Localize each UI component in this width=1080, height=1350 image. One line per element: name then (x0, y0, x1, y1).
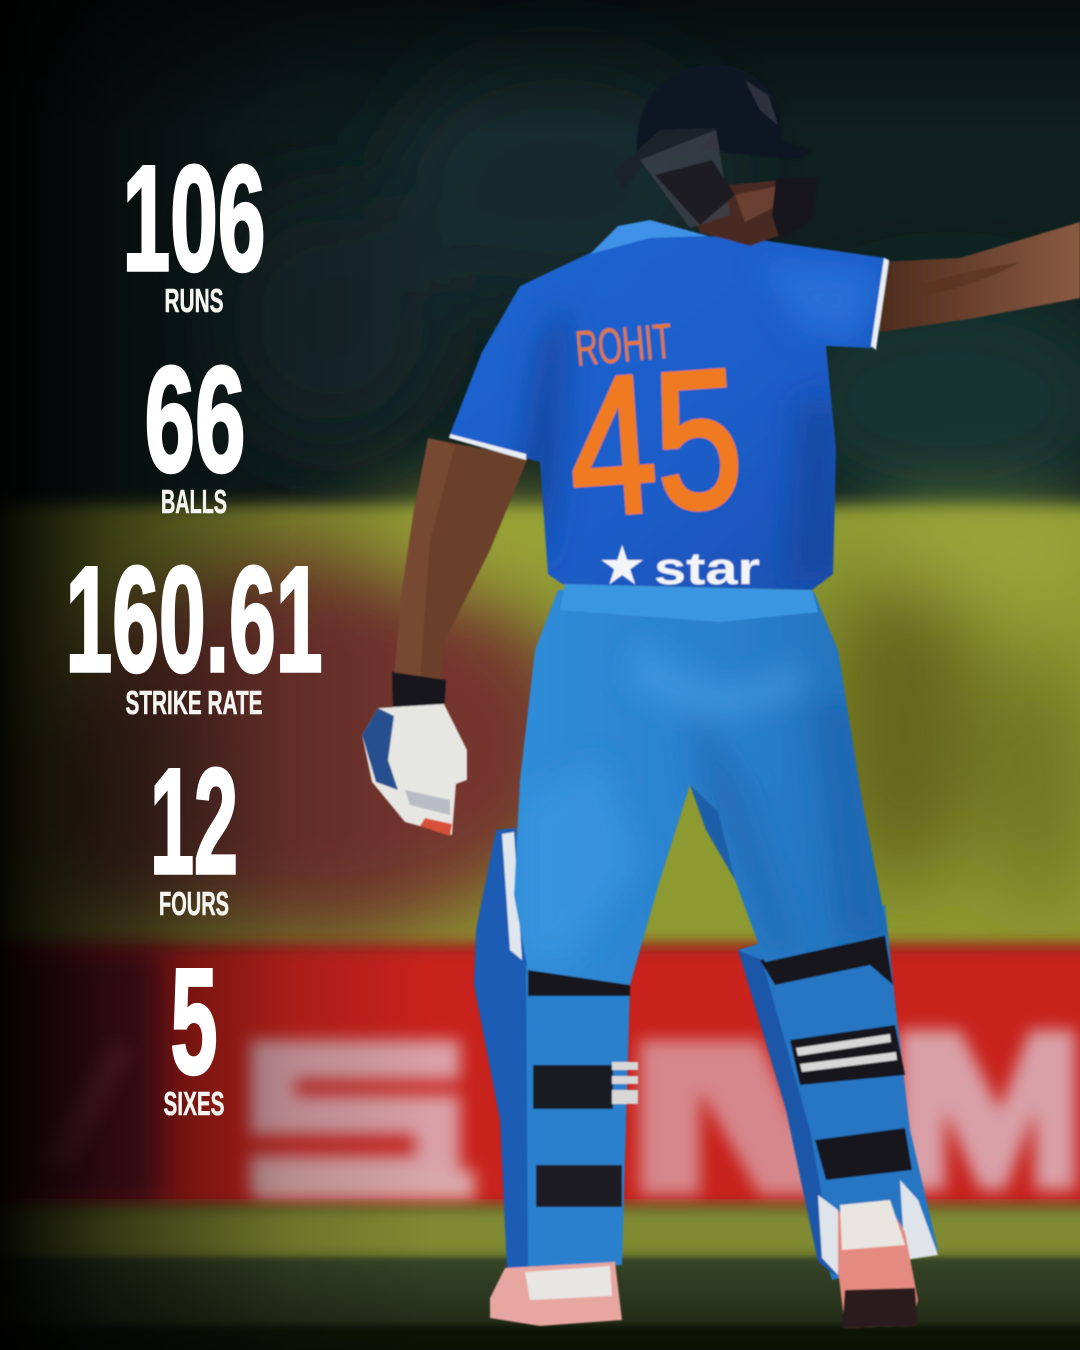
stat: runs (122, 134, 266, 319)
stat: balls (144, 335, 246, 520)
right shoe (838, 1200, 918, 1328)
label strike rate: STRIKE RATE (126, 684, 262, 721)
jersey number: 45 (562, 327, 749, 558)
head and helmet (614, 64, 818, 246)
stat: sixes (164, 937, 224, 1122)
value 12: 12 (150, 737, 238, 905)
red sponsor board (0, 945, 1080, 1210)
label runs: RUNS (164, 282, 224, 319)
value 160.61: 160.61 (66, 535, 322, 703)
label sixes: SIXES (164, 1085, 224, 1122)
wrist band (392, 672, 446, 714)
stat: strike rate (66, 535, 322, 721)
sponsor star: ★ (598, 534, 646, 597)
value 106: 106 (122, 134, 266, 302)
sleeve trims (871, 258, 889, 350)
value 66: 66 (144, 335, 246, 503)
trousers (514, 584, 890, 985)
extended right arm (878, 222, 1080, 332)
jersey name: ROHIT (573, 313, 675, 377)
label fours: FOURS (159, 885, 229, 922)
left leg pad (474, 828, 638, 1290)
value 5: 5 (170, 937, 218, 1105)
left shoe (490, 1262, 622, 1326)
ground strip and pitch (0, 1205, 1080, 1265)
green boundary board (0, 505, 1080, 950)
label balls: BALLS (161, 483, 227, 520)
glove (362, 704, 467, 836)
left arm (394, 438, 528, 682)
player figure (362, 64, 1080, 1328)
right leg pad (738, 905, 938, 1280)
collar (590, 220, 708, 254)
shirt (449, 220, 889, 597)
stat: fours (150, 737, 238, 922)
sponsor word: star (654, 543, 760, 594)
sponsor lettering (40, 1030, 1075, 1200)
